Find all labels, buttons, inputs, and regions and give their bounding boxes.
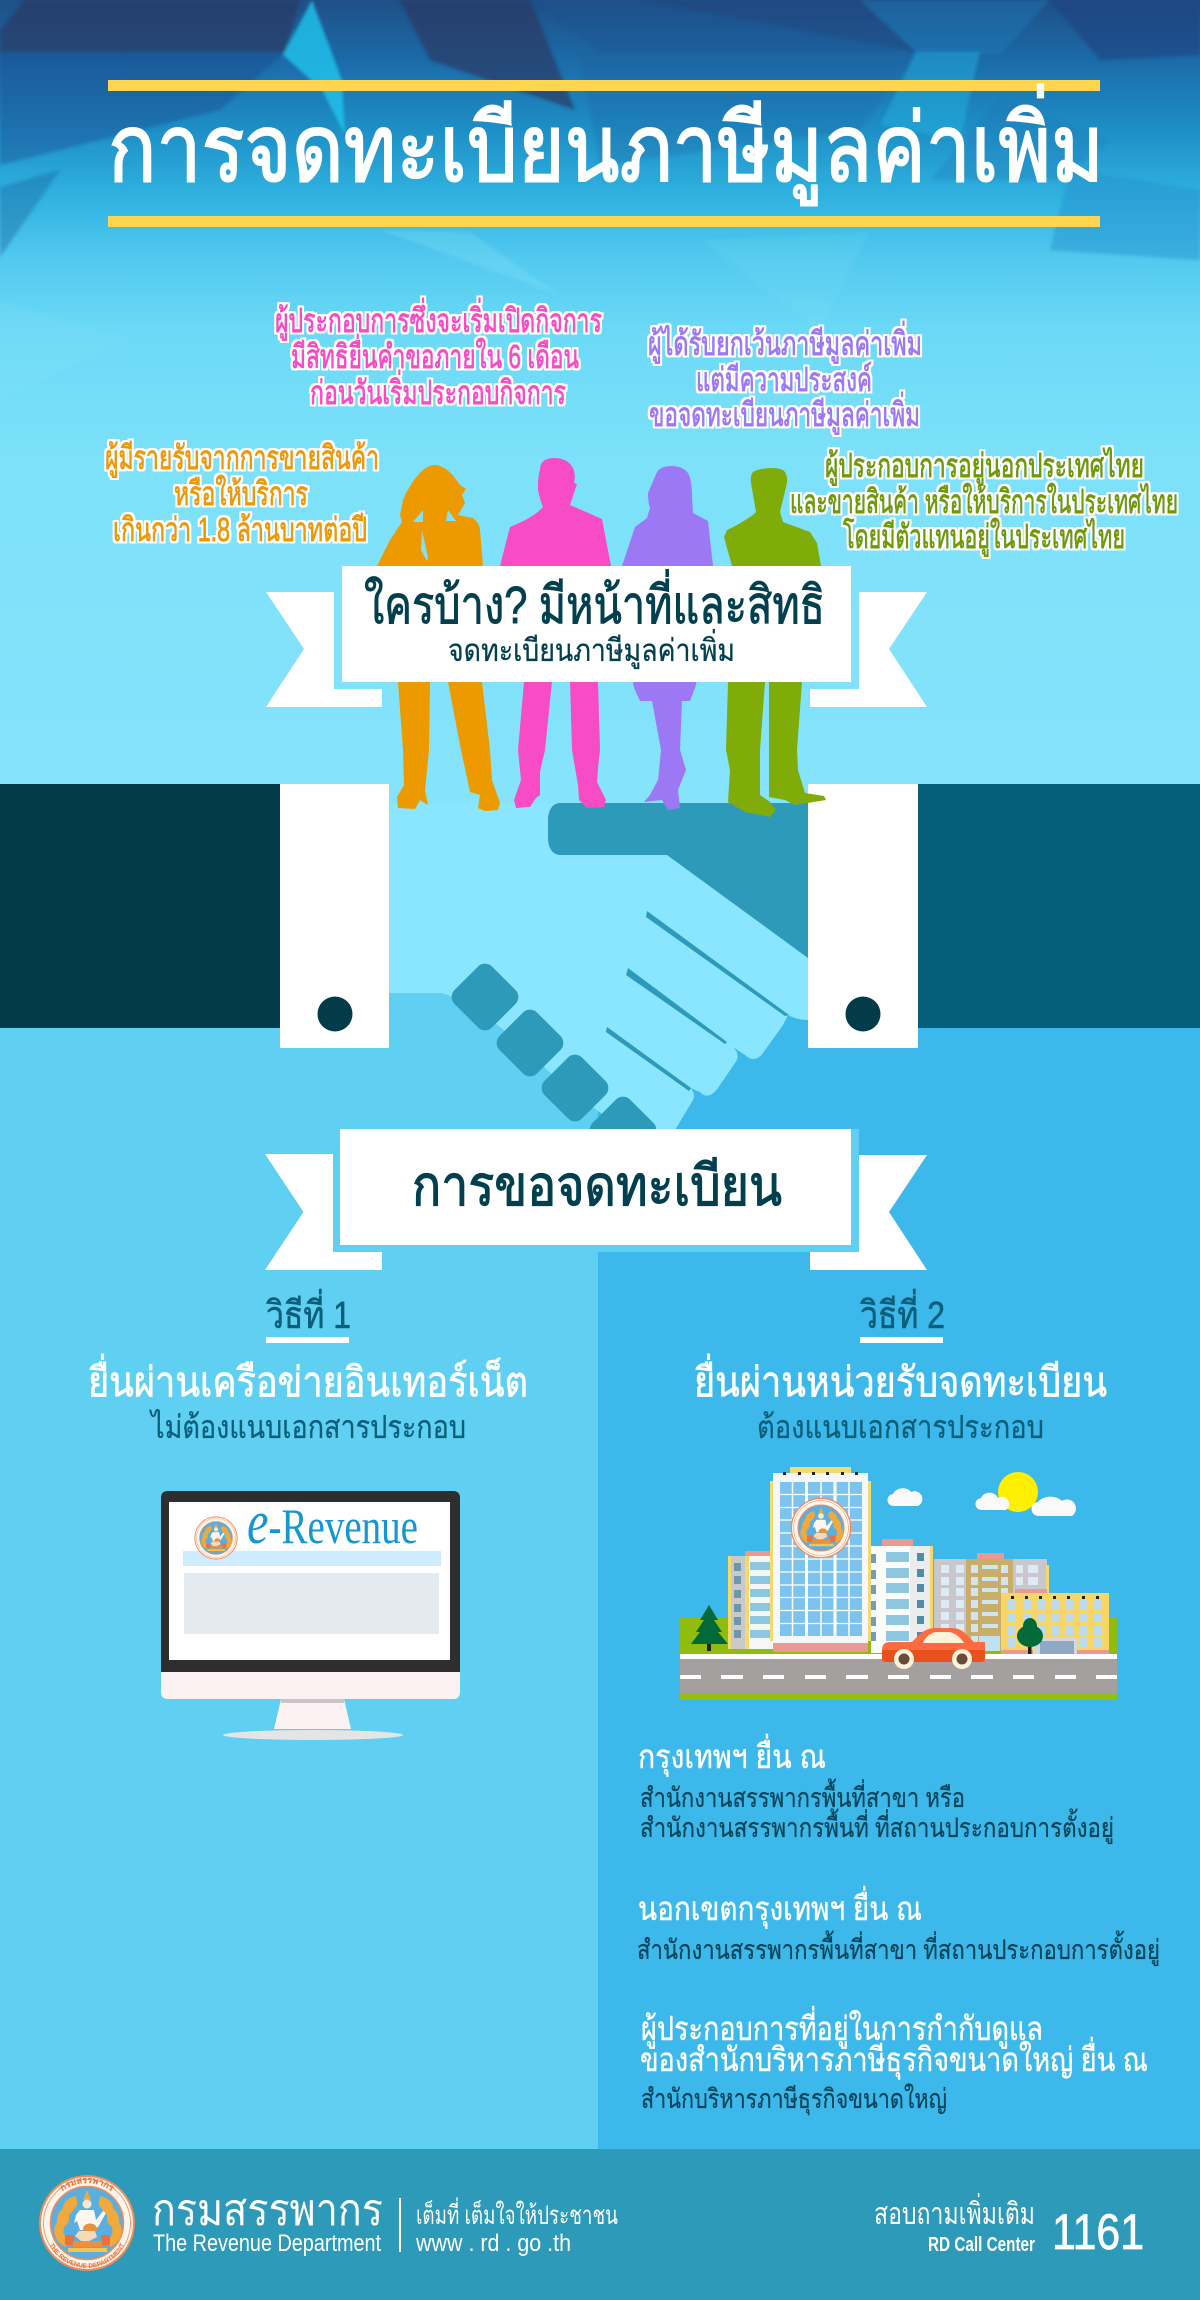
- call center: [874, 2193, 1144, 2260]
- icon: computer with e-Revenue page: [161, 1489, 460, 1740]
- title bars and title: [108, 80, 1104, 227]
- callout: purple, exempt: ผู้ได้รับยกเว้นภาษีมูลค่าเพิ่ม: [648, 321, 922, 364]
- text: outside Bangkok submission: นอกเขตกรุงเทพฯ ยื่น ณ: [638, 1886, 922, 1929]
- callout: orange, income over threshold: ผู้มีรายรับจากการขายสินค้า: [105, 439, 379, 478]
- person: purple woman: [622, 466, 713, 810]
- ribbon banner: who must register: ใครบ้าง? มีหน้าที่และสิทธิ: [364, 569, 825, 635]
- right round tree: [1017, 1618, 1043, 1657]
- text: outside Bangkok submission: [637, 1886, 1160, 1966]
- tan building: [966, 1553, 1013, 1651]
- ribbon banner: who must register: [266, 566, 927, 707]
- lower panels background: [0, 985, 1200, 2149]
- text: large taxpayer submission: [640, 2006, 1148, 2116]
- method 1 heading: ยื่นผ่านเครือข่ายอินเทอร์เน็ต: [88, 1354, 528, 1405]
- method 1 heading: ไม่ต้องแนบเอกสารประกอบ: [148, 1409, 466, 1445]
- handshake band: [0, 784, 1200, 1167]
- method 2 heading: วิธีที่ 2: [860, 1289, 945, 1337]
- left cuff: [280, 784, 389, 1048]
- callout: pink, new business: [275, 298, 602, 411]
- footer: [0, 2149, 1200, 2300]
- callout: orange, income over threshold: [105, 439, 379, 548]
- callout: purple, exempt: ขอจดทะเบียนภาษีมูลค่าเพิ่ม: [649, 392, 920, 435]
- department name: The Revenue Department: [153, 2230, 381, 2257]
- left building: [728, 1551, 773, 1649]
- call center: 1161: [1052, 2204, 1144, 2260]
- slogan and website: www . rd . go .th: [415, 2230, 571, 2257]
- text: Bangkok submission: [638, 1734, 1114, 1844]
- person: orange woman: [377, 465, 500, 811]
- icon: computer with e-Revenue page: e-Revenue: [247, 1489, 418, 1557]
- call center: สอบถามเพิ่มเติม: [874, 2193, 1035, 2231]
- text: large taxpayer submission: สำนักบริหารภาษีธุรกิจขนาดใหญ่: [641, 2083, 947, 2116]
- grey building: [934, 1559, 1049, 1651]
- ribbon banner: who must register: จดทะเบียนภาษีมูลค่าเพิ่ม: [448, 629, 735, 669]
- emblem on screen: [195, 1517, 237, 1559]
- method 2 heading: ยื่นผ่านหน่วยรับจดทะเบียน: [694, 1354, 1107, 1405]
- method 2 heading: ต้องแนบเอกสารประกอบ: [757, 1409, 1044, 1445]
- illustration: revenue office city scene: [680, 1467, 1117, 1700]
- people silhouettes: [377, 458, 826, 817]
- road: [680, 1654, 1117, 1700]
- text: Bangkok submission: สำนักงานสรรพากรพื้นที่สาขา หรือ: [640, 1778, 965, 1813]
- main tower: [770, 1467, 871, 1652]
- department name: [152, 2186, 383, 2257]
- method 2 heading: [694, 1289, 1107, 1445]
- left pine tree: [691, 1605, 728, 1651]
- callout: pink, new business: ผู้ประกอบการซึ่งจะเริ่มเปิดกิจการ: [275, 298, 602, 341]
- callout: orange, income over threshold: หรือให้บริการ: [174, 475, 308, 512]
- callout: purple, exempt: แต่มีความประสงค์: [696, 361, 872, 398]
- person: pink man: [500, 458, 611, 808]
- person: green man: [724, 468, 826, 817]
- method 1 heading: วิธีที่ 1: [266, 1289, 351, 1337]
- sun and clouds: [887, 1472, 1076, 1516]
- footer emblem: กรมสรรพากร: [60, 2178, 114, 2192]
- footer emblem: [39, 2175, 135, 2271]
- department name: กรมสรรพากร: [152, 2186, 383, 2235]
- ribbon banner: how to register: [265, 1129, 927, 1270]
- text: large taxpayer submission: ผู้ประกอบการที่อยู่ในการกำกับดูแล: [641, 2006, 1043, 2049]
- method 1 heading: [88, 1289, 528, 1445]
- emblem on tower: [791, 1498, 851, 1558]
- text: Bangkok submission: สำนักงานสรรพากรพื้นที่ ที่สถานประกอบการตั้งอยู่: [640, 1808, 1114, 1844]
- text: Bangkok submission: กรุงเทพฯ ยื่น ณ: [638, 1734, 826, 1777]
- yellow building: [1001, 1593, 1109, 1657]
- callout: orange, income over threshold: เกินกว่า 1.8 ล้านบาทต่อปี: [113, 511, 367, 548]
- slogan and website: [415, 2197, 618, 2257]
- right cuff: [808, 784, 918, 1048]
- ribbon banner: how to register: การขอจดทะเบียน: [412, 1154, 782, 1217]
- callout: purple, exempt: [648, 321, 922, 435]
- car: [882, 1628, 985, 1669]
- callout: pink, new business: มีสิทธิยื่นคำขอภายใน 6 เดือน: [291, 334, 579, 375]
- slogan and website: เต็มที่ เต็มใจให้ประชาชน: [416, 2197, 618, 2230]
- right white building: [871, 1539, 933, 1653]
- footer emblem: THE REVENUE DEPARTMENT: [50, 2242, 124, 2268]
- background: faceted blue gradient: [0, 0, 1200, 784]
- callout: green, overseas operators: [790, 447, 1178, 557]
- hands: [389, 803, 808, 1167]
- callout: pink, new business: ก่อนวันเริ่มประกอบกิจการ: [310, 370, 566, 411]
- call center: RD Call Center: [928, 2234, 1035, 2256]
